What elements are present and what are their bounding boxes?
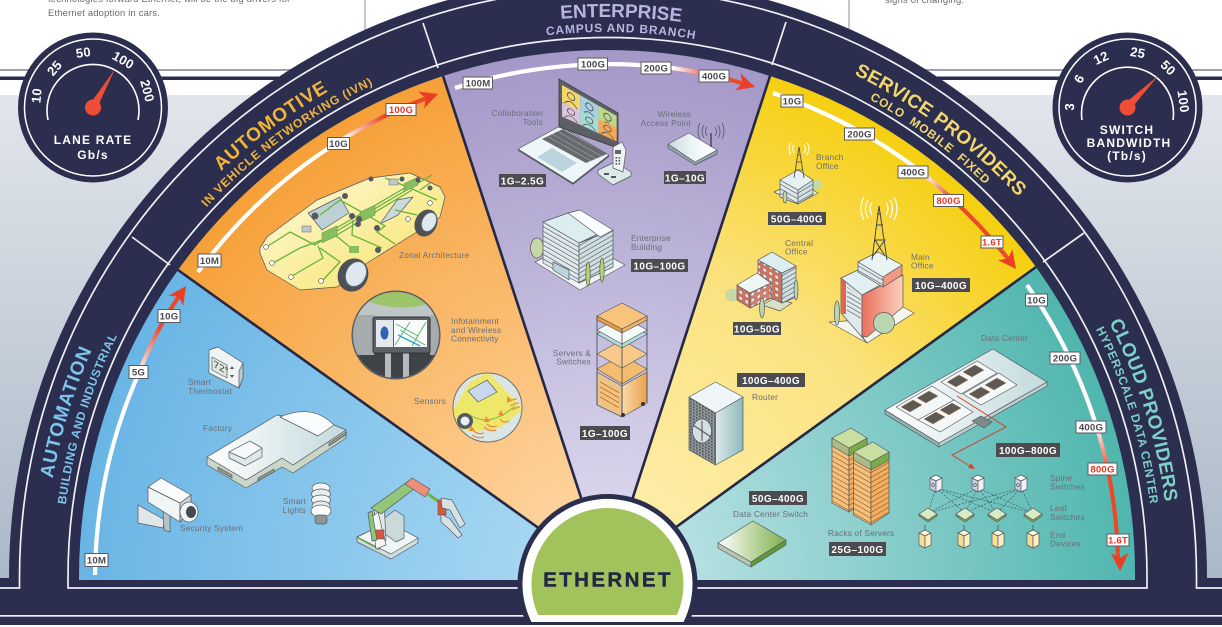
tag: 1G-2.5G: 1G–2.5G (501, 176, 544, 188)
icon: zonal architecture car (260, 173, 445, 297)
text: infotainment and wireless connectivity: and Wireless (451, 325, 501, 335)
ethernet hub: ETHERNET (543, 568, 673, 592)
text: main office: Main (911, 252, 930, 262)
speed labels: automation: 10G (160, 312, 178, 322)
gray gradient background behind arch (0, 95, 1222, 580)
panel: service providers (607, 76, 1036, 577)
text: collaboration tools: Tools (523, 117, 543, 127)
speed labels: service providers: 10G (783, 96, 801, 108)
speed labels: cloud providers: 10G (1027, 296, 1046, 306)
speed labels: service providers: 200G (847, 130, 872, 140)
speed labels: service providers: 400G (901, 168, 925, 178)
text: smart lights: Lights (283, 505, 306, 515)
text: servers and switches: Servers & (553, 348, 591, 358)
text: collaboration tools: Collaboration (492, 108, 543, 118)
text: smart thermostat: Smart (188, 377, 211, 387)
text: router: Router (752, 392, 778, 402)
icon: central office (726, 252, 798, 318)
tag: 50G-400G: 50G–400G (771, 214, 823, 226)
speed labels: cloud providers (1026, 294, 1129, 546)
speed labels: cloud providers: 800G (1090, 464, 1115, 476)
gauge: switch bandwidth: BANDWIDTH (1087, 136, 1171, 150)
text: leaf switches: Switches (1050, 512, 1085, 522)
band heading: enterprise: CAMPUS AND BRANCH (546, 24, 696, 39)
top left text fragment: Ethernet adoption in cars. (48, 7, 160, 18)
icon: robot arm (357, 478, 465, 559)
connector: data center to network (952, 396, 1006, 469)
panel: enterprise (443, 50, 770, 577)
speed labels: service providers: 800G (936, 196, 961, 207)
speed labels: cloud providers: 400G (1079, 422, 1103, 434)
text: wireless access point: Access Point (641, 118, 691, 128)
speed labels: cloud providers: 1.6T (1108, 536, 1128, 546)
gauge: switch bandwidth: 100 (1174, 89, 1192, 114)
horizontal header rules (0, 69, 1222, 80)
icon: main office with tower (829, 197, 914, 343)
text: data center switch: Data Center Switch (733, 509, 808, 519)
speed labels: automotive: 10M (200, 256, 219, 267)
ethernet hub (518, 494, 698, 622)
speed labels: enterprise (463, 58, 729, 90)
text: leaf switches: Leaf (1050, 503, 1067, 513)
icon: wireless access point (668, 123, 724, 165)
text: branch office: Branch (816, 152, 844, 162)
gauge: switch bandwidth: (Tb/s) (1107, 149, 1147, 163)
gauge: lane rate: 50 (75, 44, 92, 61)
text: smart lights: Smart (283, 496, 306, 506)
icon: server rack (597, 303, 647, 417)
speed labels: cloud providers: 200G (1053, 354, 1077, 364)
band heading: automotive: IN VEHICLE NETWORKING (IVN) (201, 78, 372, 207)
text: sensors: Sensors (414, 396, 446, 406)
text: zonal architecture: Zonal Architecture (399, 250, 470, 260)
text: factory: Factory (203, 423, 233, 433)
speed labels: automation (85, 310, 180, 566)
icon: infotainment circle (350, 290, 444, 382)
panel: automotive (178, 76, 607, 577)
tag: 100G-400G: 100G–400G (742, 376, 800, 387)
top left text fragment (48, 0, 365, 40)
band heading: service providers: SERVICE PROVIDERS (856, 64, 1026, 195)
icon: factory (207, 412, 346, 488)
gauge: lane rate (18, 32, 168, 182)
diagram: spine leaf network (919, 475, 1042, 548)
text: security system: Security System (180, 523, 243, 533)
icon: smart light bulb (311, 483, 331, 524)
icon: smart thermostat (209, 347, 243, 388)
tag: 100G-400G (737, 373, 805, 387)
speed labels: automotive: 100G (389, 105, 413, 116)
band heading: cloud providers: HYPERSCALE DATA CENTER (1096, 326, 1158, 504)
band heading: cloud providers: CLOUD PROVIDERS (1111, 319, 1178, 501)
icon: sensors circle (453, 372, 522, 442)
tag: 100G-800G: 100G–800G (999, 446, 1057, 457)
band heading: service providers: COLO MOBILE FIXED (871, 94, 989, 182)
gauge: lane rate: 25 (44, 58, 65, 79)
band heading: automation: BUILDING AND INDUSTRIAL (58, 336, 117, 504)
text: smart thermostat: Thermostat (188, 386, 232, 396)
speed arrow: automotive (198, 86, 441, 272)
gauge: lane rate: 100 (110, 48, 137, 72)
gauge: switch bandwidth: 3 (1062, 103, 1077, 111)
tag: 10G-400G: 10G–400G (915, 281, 967, 292)
speed arrow: service providers (773, 93, 1023, 274)
band heading: automotive: AUTOMOTIVE (216, 80, 328, 171)
icon: laptop and phone (518, 79, 631, 185)
text: racks of servers: Racks of Servers (828, 528, 894, 538)
text: infotainment and wireless connectivity: Connectivity (451, 334, 499, 344)
speed labels: automation: 10M (87, 556, 106, 566)
text: spine switches: Spine (1050, 473, 1072, 483)
text: data center: Data Center (981, 333, 1028, 343)
tag: 10G-50G: 10G–50G (734, 324, 780, 336)
icon: security camera (138, 478, 198, 532)
speed labels: service providers: 1.6T (982, 238, 1002, 248)
text: enterprise building: Building (631, 242, 662, 252)
tag: 25G-100G: 25G–100G (831, 545, 884, 556)
speed labels: enterprise: 100M (466, 78, 490, 90)
icon: branch office (774, 143, 822, 204)
speed arrow: cloud providers (1027, 285, 1129, 571)
top right text fragment (849, 0, 964, 40)
speed labels: enterprise: 100G (581, 60, 605, 70)
gauge: lane rate: Gb/s (77, 148, 109, 162)
icon: enterprise building (530, 210, 625, 290)
band heading: automation: AUTOMATION (40, 346, 92, 478)
icon: smart thermostat: 72° (214, 359, 229, 378)
tag: 1G-100G: 1G–100G (582, 429, 628, 440)
speed arrow: enterprise (455, 64, 758, 96)
speed labels: enterprise: 200G (644, 64, 668, 74)
tag: 10G-100G: 10G–100G (633, 262, 686, 272)
gauge: switch bandwidth: 12 (1091, 48, 1111, 68)
icon: data center switch (718, 521, 786, 567)
gauge: lane rate: 200 (137, 78, 158, 104)
speed arrow: automation (95, 281, 193, 575)
text: spine switches: Switches (1050, 482, 1085, 492)
text: end devices: Devices (1050, 538, 1081, 548)
text: main office: Office (911, 260, 934, 270)
gauge: switch bandwidth: SWITCH (1100, 123, 1154, 137)
gauge: lane rate: LANE RATE (54, 133, 132, 147)
gauge: lane rate: 10 (28, 87, 45, 104)
text: infotainment and wireless connectivity: Infotainment (451, 316, 499, 326)
text: central office: Office (785, 246, 808, 256)
band heading: enterprise (546, 4, 696, 39)
text: enterprise building: Enterprise (631, 233, 671, 243)
gauge: switch bandwidth: 25 (1129, 44, 1147, 61)
tag: 50G-400G cloud: 50G–400G (752, 494, 804, 505)
band heading: enterprise: ENTERPRISE (561, 4, 682, 22)
panel: automation (79, 270, 607, 580)
gauge: switch bandwidth: 6 (1071, 72, 1087, 86)
tag: 1G-10G: 1G–10G (665, 174, 705, 184)
text: central office: Central (785, 238, 813, 248)
speed labels: automotive: 10G (329, 139, 348, 150)
speed labels: automation: 5G (132, 368, 145, 378)
speed labels: automotive (198, 104, 416, 267)
speed labels: service providers (781, 95, 1003, 248)
text: end devices: End (1050, 530, 1065, 540)
icon: racks of servers (832, 428, 889, 525)
speed labels: enterprise: 400G (702, 72, 726, 82)
gauge: switch bandwidth (1052, 32, 1202, 182)
gauge: switch bandwidth: 50 (1158, 57, 1179, 78)
panel: cloud providers (607, 267, 1135, 580)
icon: router (689, 382, 743, 465)
text: servers and switches: Switches (556, 356, 591, 366)
text: branch office: Office (816, 161, 839, 171)
icon: data center (885, 349, 1047, 447)
text: wireless access point: Wireless (658, 109, 691, 119)
